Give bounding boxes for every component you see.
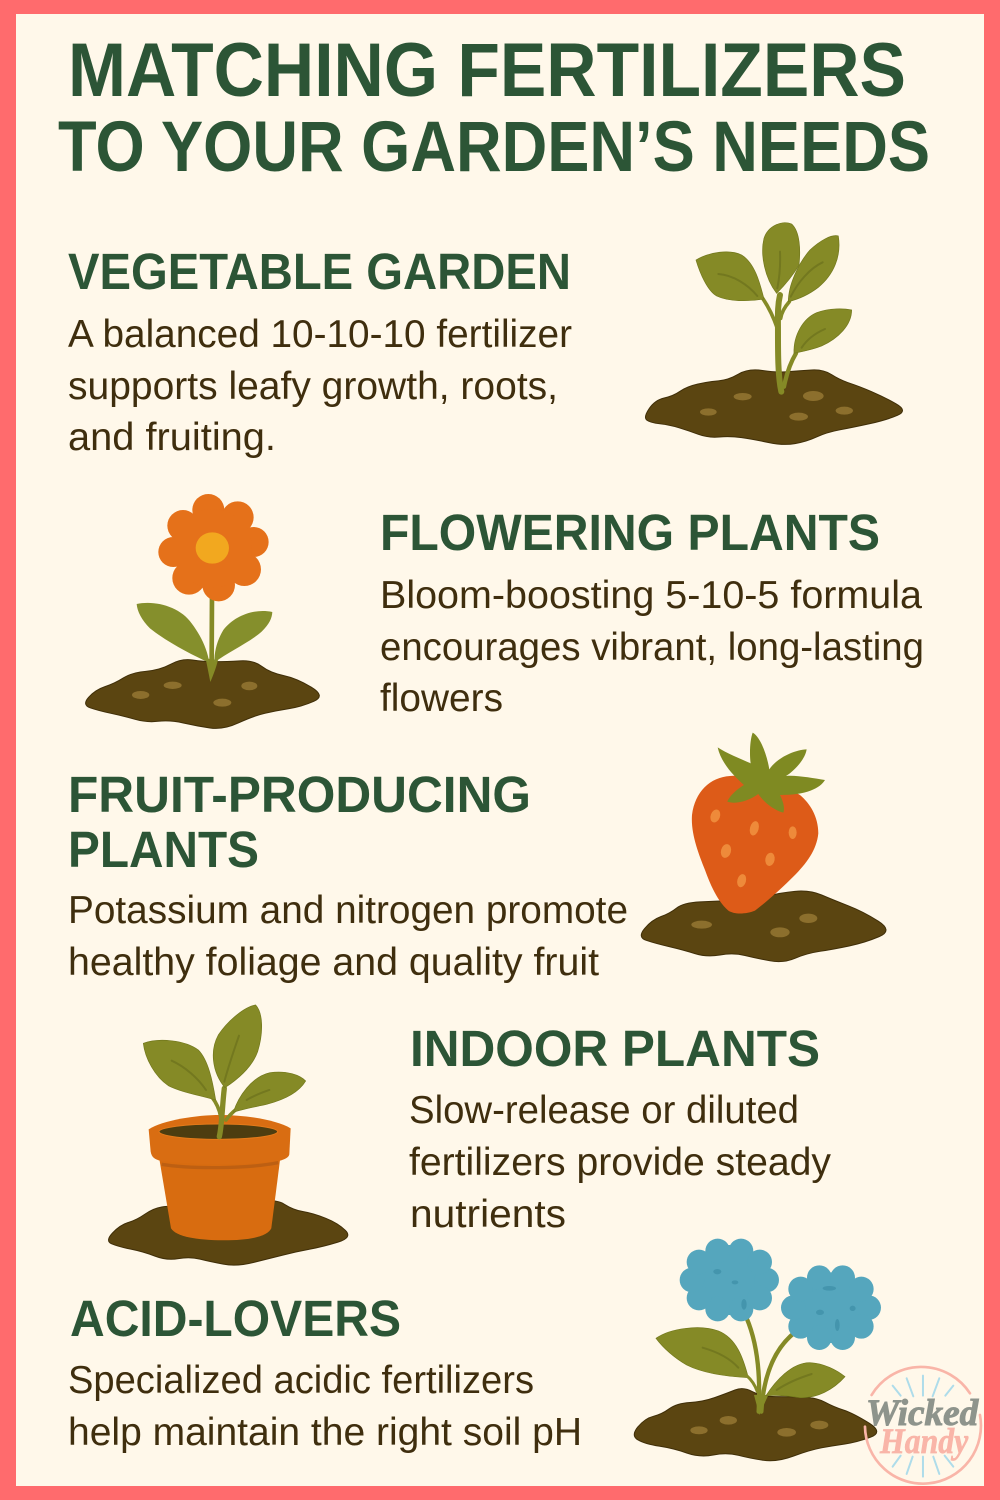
text: indoor plants description: nutrients: [410, 1193, 566, 1236]
heading: fruit-producing plants: PLANTS: [68, 821, 259, 878]
text: indoor plants description: fertilizers provide steady: [409, 1141, 831, 1184]
text: acid-lovers description: [68, 1359, 582, 1454]
text: indoor plants description: [409, 1089, 831, 1236]
icon: seedling in soil: [645, 223, 903, 444]
text: flowering plants description: Bloom-boosting 5-10-5 formula: [380, 574, 922, 617]
title: MATCHING FERTILIZERS: [68, 28, 906, 113]
logo: Wicked Handy watermark: [865, 1367, 981, 1484]
panel: fruit-producing plants: [68, 733, 886, 984]
text: vegetable garden description: [68, 313, 572, 459]
logo: Wicked Handy watermark: Handy: [879, 1421, 969, 1461]
text: fruit-producing plants description: [68, 889, 628, 984]
panel: flowering plants: [86, 494, 924, 728]
heading: fruit-producing plants: [68, 766, 531, 878]
panel: acid-lovers: [68, 1239, 881, 1461]
heading: vegetable garden: VEGETABLE GARDEN: [68, 243, 571, 300]
title: [58, 28, 930, 187]
text: flowering plants description: [380, 574, 924, 720]
text: indoor plants description: Slow-release or diluted: [409, 1089, 799, 1132]
text: vegetable garden description: A balanced 10-10-10 fertilizer: [68, 313, 572, 356]
heading: acid-lovers: ACID-LOVERS: [70, 1290, 401, 1347]
text: fruit-producing plants description: Potassium and nitrogen promote: [68, 889, 628, 932]
heading: indoor plants: INDOOR PLANTS: [410, 1020, 820, 1077]
icon: orange flower in soil: [86, 494, 319, 728]
heading: fruit-producing plants: FRUIT-PRODUCING: [68, 766, 531, 823]
text: fruit-producing plants description: healthy foliage and quality fruit: [68, 941, 599, 984]
text: acid-lovers description: Specialized acidic fertilizers: [68, 1359, 534, 1402]
text: flowering plants description: encourages vibrant, long-lasting: [380, 626, 924, 669]
logo: Wicked Handy watermark: Wicked: [866, 1393, 980, 1434]
icon: strawberry on soil: [641, 733, 886, 962]
panel: indoor plants: [109, 1005, 831, 1265]
heading: flowering plants: FLOWERING PLANTS: [380, 504, 880, 561]
text: flowering plants description: flowers: [380, 677, 503, 720]
text: vegetable garden description: and fruiting.: [68, 416, 276, 459]
icon: blue hydrangeas in soil: [634, 1239, 881, 1461]
text: acid-lovers description: help maintain the right soil pH: [68, 1411, 582, 1454]
text: vegetable garden description: supports leafy growth, roots,: [68, 365, 558, 408]
icon: potted plant on soil: [109, 1005, 348, 1265]
panel: vegetable garden: [68, 223, 903, 459]
